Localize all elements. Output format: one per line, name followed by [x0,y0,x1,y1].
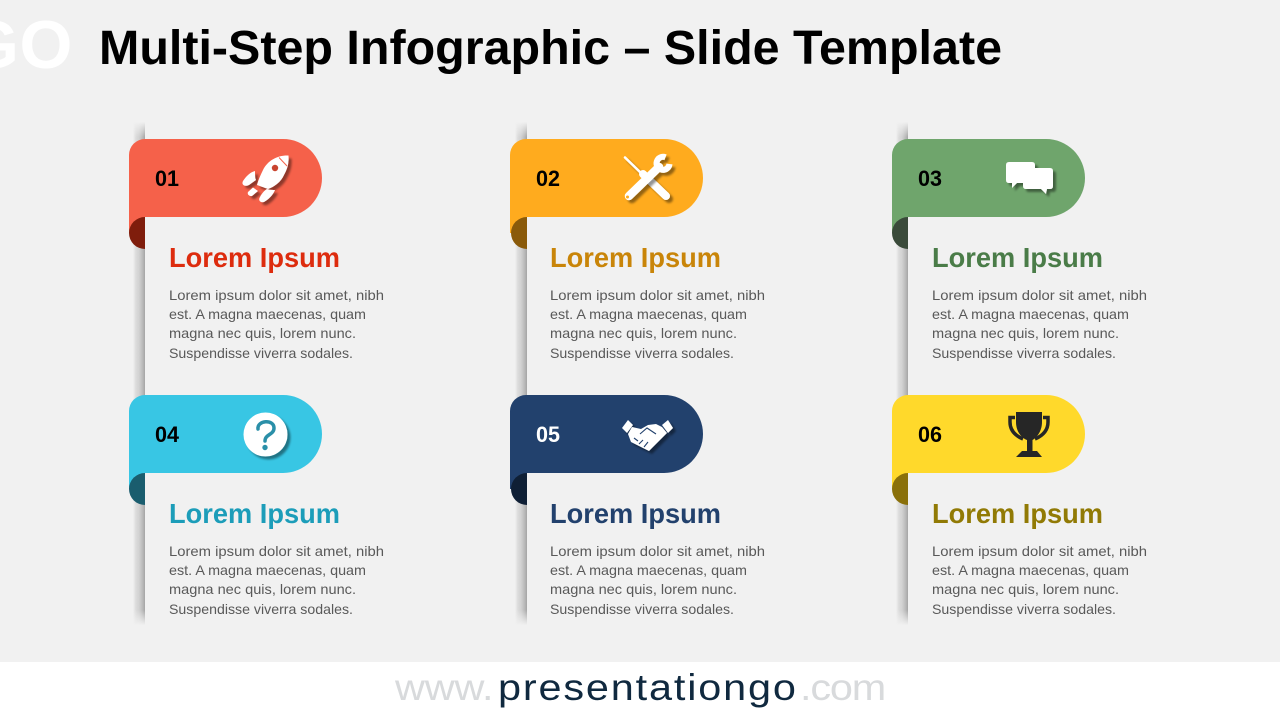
heading 06: Lorem Ipsum [932,498,1103,529]
fold shadow: column 1 [133,122,145,625]
body text 03: est. A magna maecenas, quam [932,306,1129,322]
icon: handshake [622,420,673,451]
icon: speech bubbles [1006,162,1053,194]
icon: trophy [1010,412,1048,457]
body text 06: magna nec quis, lorem nunc. [932,581,1119,597]
ribbon tab 06 [892,395,1085,489]
ribbon fold 02 [511,217,527,249]
fold shadow: column 3 [896,122,908,625]
body text 05: Suspendisse viverra sodales. [550,601,734,617]
title: Multi-Step Infographic – Slide Template [99,22,1002,75]
number 02: 02 [536,166,560,191]
heading 02: Lorem Ipsum [550,242,721,273]
body text 03: Lorem ipsum dolor sit amet, nibh [932,287,1147,303]
panel: step 06 [892,395,1147,617]
body text 02: magna nec quis, lorem nunc. [550,325,737,341]
panel: step 02 [510,139,765,361]
body text 04: magna nec quis, lorem nunc. [169,581,356,597]
body text 02: Lorem ipsum dolor sit amet, nibh [550,287,765,303]
heading 03: Lorem Ipsum [932,242,1103,273]
footer band [0,662,1280,720]
body text 06: Suspendisse viverra sodales. [932,601,1116,617]
fold shadow: column 2 [515,122,527,625]
body text 04: Suspendisse viverra sodales. [169,601,353,617]
body text 06: est. A magna maecenas, quam [932,562,1129,578]
number 04: 04 [155,422,180,447]
body text 06: Lorem ipsum dolor sit amet, nibh [932,543,1147,559]
panel: step 05 [510,395,765,617]
body text 04: Lorem ipsum dolor sit amet, nibh [169,543,384,559]
body text 01: magna nec quis, lorem nunc. [169,325,356,341]
heading 01: Lorem Ipsum [169,242,340,273]
body text 04: est. A magna maecenas, quam [169,562,366,578]
ribbon fold 04 [129,473,145,505]
number 01: 01 [155,166,179,191]
body text 01: Suspendisse viverra sodales. [169,345,353,361]
icon: rocket [242,155,289,202]
ribbon fold 05 [511,473,527,505]
footer url: www: www. [394,667,494,708]
body text 01 [169,287,384,361]
ribbon tab 02 [510,139,703,233]
icon: tools [625,157,670,198]
body text 04 [169,543,384,617]
body text 03: magna nec quis, lorem nunc. [932,325,1119,341]
body text 01: Lorem ipsum dolor sit amet, nibh [169,287,384,303]
body text 05 [550,543,765,617]
heading 04: Lorem Ipsum [169,498,340,529]
ribbon tab 04 [129,395,322,489]
body text 03 [932,287,1147,361]
ribbon tab 05 [510,395,703,489]
footer url: presentationgo: presentationgo [498,667,796,708]
panel: step 03 [892,139,1147,361]
logo fragment: O [20,7,72,83]
body text 06 [932,543,1147,617]
heading 05: Lorem Ipsum [550,498,721,529]
body text 01: est. A magna maecenas, quam [169,306,366,322]
ribbon tab 01 [129,139,322,233]
body text 02 [550,287,765,361]
ribbon tab 03 [892,139,1085,233]
number 06: 06 [918,422,942,447]
body text 03: Suspendisse viverra sodales. [932,345,1116,361]
body text 05: Lorem ipsum dolor sit amet, nibh [550,543,765,559]
footer url: com: .com [800,667,886,708]
ribbon fold 01 [129,217,145,249]
panel: step 01 [129,139,384,361]
icon: question mark [244,412,288,456]
number 03: 03 [918,166,942,191]
panel: step 04 [129,395,384,617]
ribbon fold 06 [892,473,908,505]
ribbon fold 03 [892,217,908,249]
body text 02: Suspendisse viverra sodales. [550,345,734,361]
body text 02: est. A magna maecenas, quam [550,306,747,322]
body text 05: est. A magna maecenas, quam [550,562,747,578]
number 05: 05 [536,422,560,447]
body text 05: magna nec quis, lorem nunc. [550,581,737,597]
